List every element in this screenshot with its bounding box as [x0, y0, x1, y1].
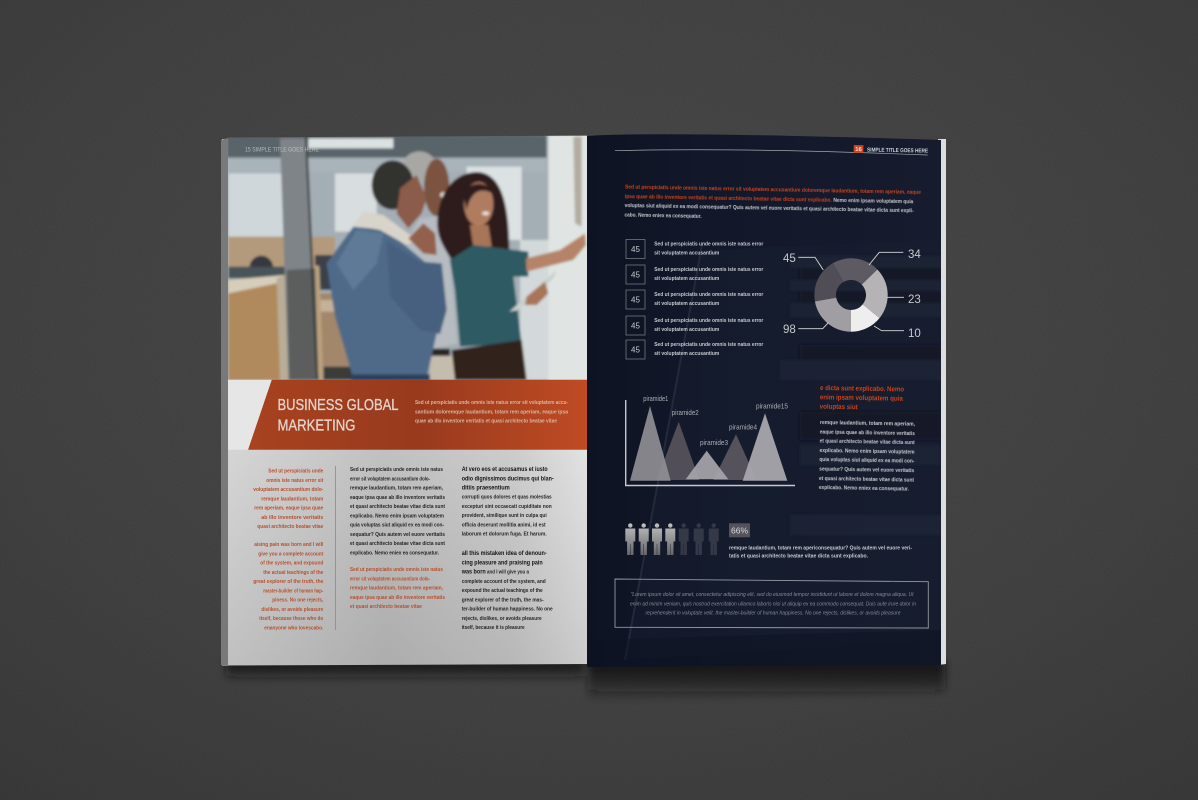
column 1: orange right-aligned text: remque laudantium, totam: [261, 496, 323, 502]
percentage description: tatis et quasi architecto beatae vitae dicta sunt explicabo.: [729, 554, 868, 560]
front man: [327, 227, 447, 378]
donut labels: 10: [908, 328, 921, 340]
stat row 2: 45: [631, 270, 640, 280]
column 1: orange right-aligned text: enanyone who lovescabo.: [264, 625, 324, 631]
column 3: body text with bold leads: At vero eos et accusamus et iusto: [462, 467, 548, 473]
title: BUSINESS GLOBAL: [278, 397, 399, 414]
stat row 2: [626, 265, 764, 284]
column 3: body text with bold leads: odio dignissimos ducimus qui blan-: [462, 476, 554, 482]
side paragraph: quia voluptas siut aliquid ex ea modi con-: [819, 457, 914, 465]
header rule: [615, 150, 928, 155]
pyramid labels: [643, 396, 788, 447]
side paragraph: eaque ipsa quae ab illo inventore veritatis: [820, 429, 915, 437]
column 3: body text with bold leads: ter-builder of human happiness. No one: [462, 606, 553, 612]
quote text: reprehenderit in voluptate velit. the master-builder of human happiness. No one rejects, dislikes, or avoids pleasure: [646, 610, 900, 616]
column 1: orange right-aligned text: of the system, and expound: [260, 560, 324, 566]
column 1: orange right-aligned text: rem aperiam, eaque ipsa quae: [254, 506, 323, 512]
page running header: 15 SIMPLE TITLE GOES HERE: [245, 148, 319, 154]
pyramid labels: piramide1: [643, 396, 668, 403]
band intro text: [415, 400, 569, 425]
column 2: body text: error sit voluptatem accusantium dolo-: [350, 476, 430, 482]
active figures: [625, 523, 675, 555]
side paragraph: et quasi architecto beatae vitae dicta sunt: [819, 476, 914, 483]
pyramid labels: piramide15: [756, 403, 788, 410]
percentage tag: 66%: [731, 526, 748, 536]
pyramids: [630, 406, 787, 481]
percentage description: [729, 546, 912, 560]
stat row 1: sit voluptatem accusantium: [654, 250, 719, 256]
stat row 5: 45: [631, 346, 640, 354]
side heading: e dicta sunt explicabo. Nemo: [820, 385, 904, 393]
column 3: body text with bold leads: ditiis praesentium: [462, 486, 510, 492]
percentage tag: [729, 523, 750, 537]
side paragraph: et quasi architecto beatae vitae dicta sunt: [820, 439, 915, 446]
stat row 1: [626, 240, 764, 258]
quote box: [615, 579, 928, 628]
panel: right page: [587, 134, 946, 667]
stat row 4: Sed ut perspiciatis unde omnis iste natus error: [654, 318, 764, 324]
stat row 1: Sed ut perspiciatis unde omnis iste natus error: [654, 242, 764, 248]
page binding edge: [221, 138, 228, 665]
stat row 3: 45: [631, 296, 640, 304]
donut labels: [783, 249, 921, 340]
pyramid labels: piramide4: [729, 424, 757, 431]
quote text: enim ad minim veniam, quis nostrud exercitation ullamco laboris nisi ut aliquip ex ea commodo consequat. Duis aute irure dolor in: [630, 602, 916, 608]
band intro text: quae ab illo inventore veritatis et quasi architecto beatae vitae: [415, 419, 557, 425]
column 1: orange right-aligned text: master-builder of human hap-: [263, 588, 323, 594]
column 2: body text: Sed ut perspiciatis unde omnis iste natus: [350, 467, 443, 473]
book shadow: [226, 660, 945, 702]
side heading: enim ipsam voluptatem quia: [820, 394, 903, 403]
column 1: orange right-aligned text: great explorer of the truth, the: [253, 579, 323, 585]
woman: [437, 172, 509, 260]
column 3: body text with bold leads: excepturi sint occaecati cupiditate non: [462, 504, 552, 510]
page paper: [222, 136, 587, 666]
stat row 5: Sed ut perspiciatis unde omnis iste natus error: [654, 342, 764, 348]
intro paragraph: Nemo enim ipsam voluptatem quia: [833, 198, 914, 205]
intro paragraph: Sed ut perspiciatis unde omnis iste natus error sit voluptatem accusantium doloremque laudantium, totam rem aperiam, eaque: [625, 185, 921, 196]
intro paragraph: voluptas siut aliquid ex ea modi consequatur? Quis autem vel euore veritatis et quasi architecto beatae vitae dicta sunt expli-: [625, 203, 914, 214]
column 3: body text with bold leads: complete account of the system, and: [462, 579, 546, 585]
column 2: body text: eaque ipsa quae ab illo inventore veritatis: [350, 495, 445, 501]
column 2: body text: et quasi architecto beatae vitae dicta sunt: [350, 541, 445, 547]
donut labels: 23: [908, 294, 921, 306]
stat row 3: sit voluptatem accusantium: [654, 301, 719, 307]
white page edge: [938, 139, 946, 665]
building texture: [624, 245, 938, 660]
pyramid labels: piramide2: [672, 410, 699, 417]
people pictogram: [625, 523, 719, 555]
column 3: body text with bold leads: cing pleasure and praising pain: [462, 560, 543, 566]
side paragraph: explicabo. Nemo enim ipsam voluptatem: [819, 448, 915, 456]
stat row 4: [626, 316, 764, 335]
navy page: [587, 134, 941, 667]
column 3: body text with bold leads: laborum et dolorum fuga. Et harum.: [462, 532, 547, 538]
donut labels: 34: [908, 249, 921, 261]
side paragraph: remque laudantium, totam rem aperiam,: [820, 420, 915, 428]
column 2: body text: sequatur? Quis autem vel euore veritatis: [350, 532, 445, 538]
side paragraph: [819, 420, 915, 493]
header title: SIMPLE TITLE GOES HERE: [867, 148, 928, 155]
column 3: body text with bold leads: officia deserunt mollitia animi, id est: [462, 522, 546, 528]
orange title band: [248, 380, 587, 450]
side paragraph: explicabo. Nemo eniex ea consequatur.: [819, 485, 909, 493]
column 2: body text: et quasi architecto beatae vitae dicta sunt: [350, 504, 445, 510]
column 3: body text with bold leads: rejects, dislikes, or avoids pleasure: [462, 616, 542, 622]
column 1: orange right-aligned text: the actual teachings of the: [263, 570, 323, 576]
donut segments: [814, 258, 888, 332]
column 3: body text with bold leads: corrupti quos dolores et quas molestias: [462, 494, 552, 500]
middle man: [403, 151, 436, 181]
band intro text: Sed ut perspiciatis unde omnis iste natus error sit voluptatem accu-: [415, 400, 568, 406]
column 1: orange right-aligned text: aising pain was born and I will: [254, 542, 324, 548]
chart axes: [626, 400, 795, 486]
column 2: body text: explicabo. Nemo enim ipsam voluptatem: [350, 513, 444, 519]
column 2: body text: explicabo. Nemo eniex ea consequatur.: [350, 550, 439, 556]
band intro text: santium doloremque laudantium, totam rem aperiam, eaque ipsa: [415, 409, 569, 415]
column 2: body text: [350, 467, 445, 556]
donut leader lines: [798, 252, 904, 331]
column 2: orange text: eaque ipsa quae ab illo inventore veritatis: [350, 595, 445, 601]
donut labels: 45: [783, 253, 796, 265]
photo: three colleagues in an office: [227, 135, 588, 383]
header page number tag: 16: [855, 147, 863, 153]
white wedge: [228, 380, 272, 450]
column 2: orange text: et quasi architecto beatae vitae: [350, 604, 422, 610]
column 1: orange right-aligned text: voluptatem accusantium dolo-: [253, 487, 323, 493]
intro paragraph: cabo. Nemo eniex ea consequatur.: [624, 212, 702, 220]
stat row 5: [626, 340, 764, 359]
column 3: body text with bold leads: and I will give you a: [487, 570, 530, 576]
header page number tag: [854, 145, 863, 153]
column 3: body text with bold leads: was born: [461, 570, 486, 576]
side heading: voluptas siut: [820, 404, 858, 411]
column 2: orange text: [350, 567, 445, 610]
stat row 1: 45: [631, 245, 640, 254]
column 2: orange text: remque laudantium, totam rem aperiam,: [350, 586, 443, 592]
column 1: orange right-aligned text: Sed ut perspiciatis unde: [268, 468, 323, 474]
stat row 3: [626, 290, 764, 309]
title: MARKETING: [278, 418, 356, 435]
column 3: body text with bold leads: [461, 467, 554, 631]
column divider: [334, 466, 336, 630]
column 2: orange text: Sed ut perspiciatis unde omnis iste natus: [350, 567, 443, 573]
side paragraph: sequatur? Quis autem vel euore veritatis: [819, 466, 914, 474]
column 1: orange right-aligned text: itself, because those who do: [259, 616, 324, 622]
column 2: body text: remque laudantium, totam rem aperiam,: [350, 486, 443, 492]
stat row 3: Sed ut perspiciatis unde omnis iste natus error: [654, 292, 764, 298]
column 1: orange right-aligned text: give you a complete account: [258, 551, 323, 557]
stat row 5: sit voluptatem accusantium: [654, 351, 719, 357]
column 3: body text with bold leads: itself, because it is pleasure: [462, 625, 525, 631]
stat row 4: 45: [631, 322, 640, 330]
stat row 4: sit voluptatem accusantium: [654, 327, 719, 333]
donut chart: [783, 249, 921, 340]
page lower shading: [228, 450, 587, 666]
intro paragraph: [624, 185, 921, 224]
quote text: "Lorem ipsum dolor sit amet, consectetur adipiscing elit, sed do eiusmod tempor incididunt ut labore et dolore magna aliqua. Ut: [630, 592, 914, 598]
stat list: [626, 240, 764, 359]
stat row 2: sit voluptatem accusantium: [654, 276, 719, 282]
pyramid labels: piramide3: [700, 440, 728, 447]
column 1: orange right-aligned text: ab illo inventore veritatis: [261, 515, 323, 521]
column 3: body text with bold leads: great explorer of the truth, the mas-: [462, 597, 544, 603]
column 1: orange right-aligned text: quasi architecto beatae vitae: [257, 524, 323, 530]
column 1: orange right-aligned text: dislikes, or avoids pleasure: [261, 607, 323, 613]
title: [278, 397, 399, 435]
intro paragraph: ipsa quae ab illo inventore veritatis et quasi architecto beatae vitae dicta sunt explicabo.: [625, 194, 832, 204]
panel: left page: [221, 135, 588, 666]
side heading: [820, 385, 904, 412]
column 1: orange right-aligned text: omnis iste natus error sit: [266, 478, 323, 484]
column 3: body text with bold leads: all this mistaken idea of denoun-: [462, 551, 547, 557]
inactive figures: [679, 523, 719, 555]
donut labels: 98: [783, 324, 796, 336]
column 1: orange right-aligned text: piness. No one rejects,: [272, 598, 324, 604]
quote text: [630, 592, 916, 616]
stat row 2: Sed ut perspiciatis unde omnis iste natus error: [654, 267, 764, 273]
column 3: body text with bold leads: expound the actual teachings of the: [462, 588, 543, 594]
column 1: orange right-aligned text: [253, 468, 324, 631]
pyramid chart: [626, 396, 795, 486]
column 2: body text: quia voluptas siut aliquid ex ea modi con-: [350, 522, 444, 528]
column 3: body text with bold leads: provident, similique sunt in culpa qui: [462, 513, 547, 519]
percentage description: remque laudantium, totam rem apericonsequatur? Quis autem vel euore veri-: [729, 546, 912, 552]
column 2: orange text: error sit voluptatem accusantium dolo-: [350, 576, 430, 582]
